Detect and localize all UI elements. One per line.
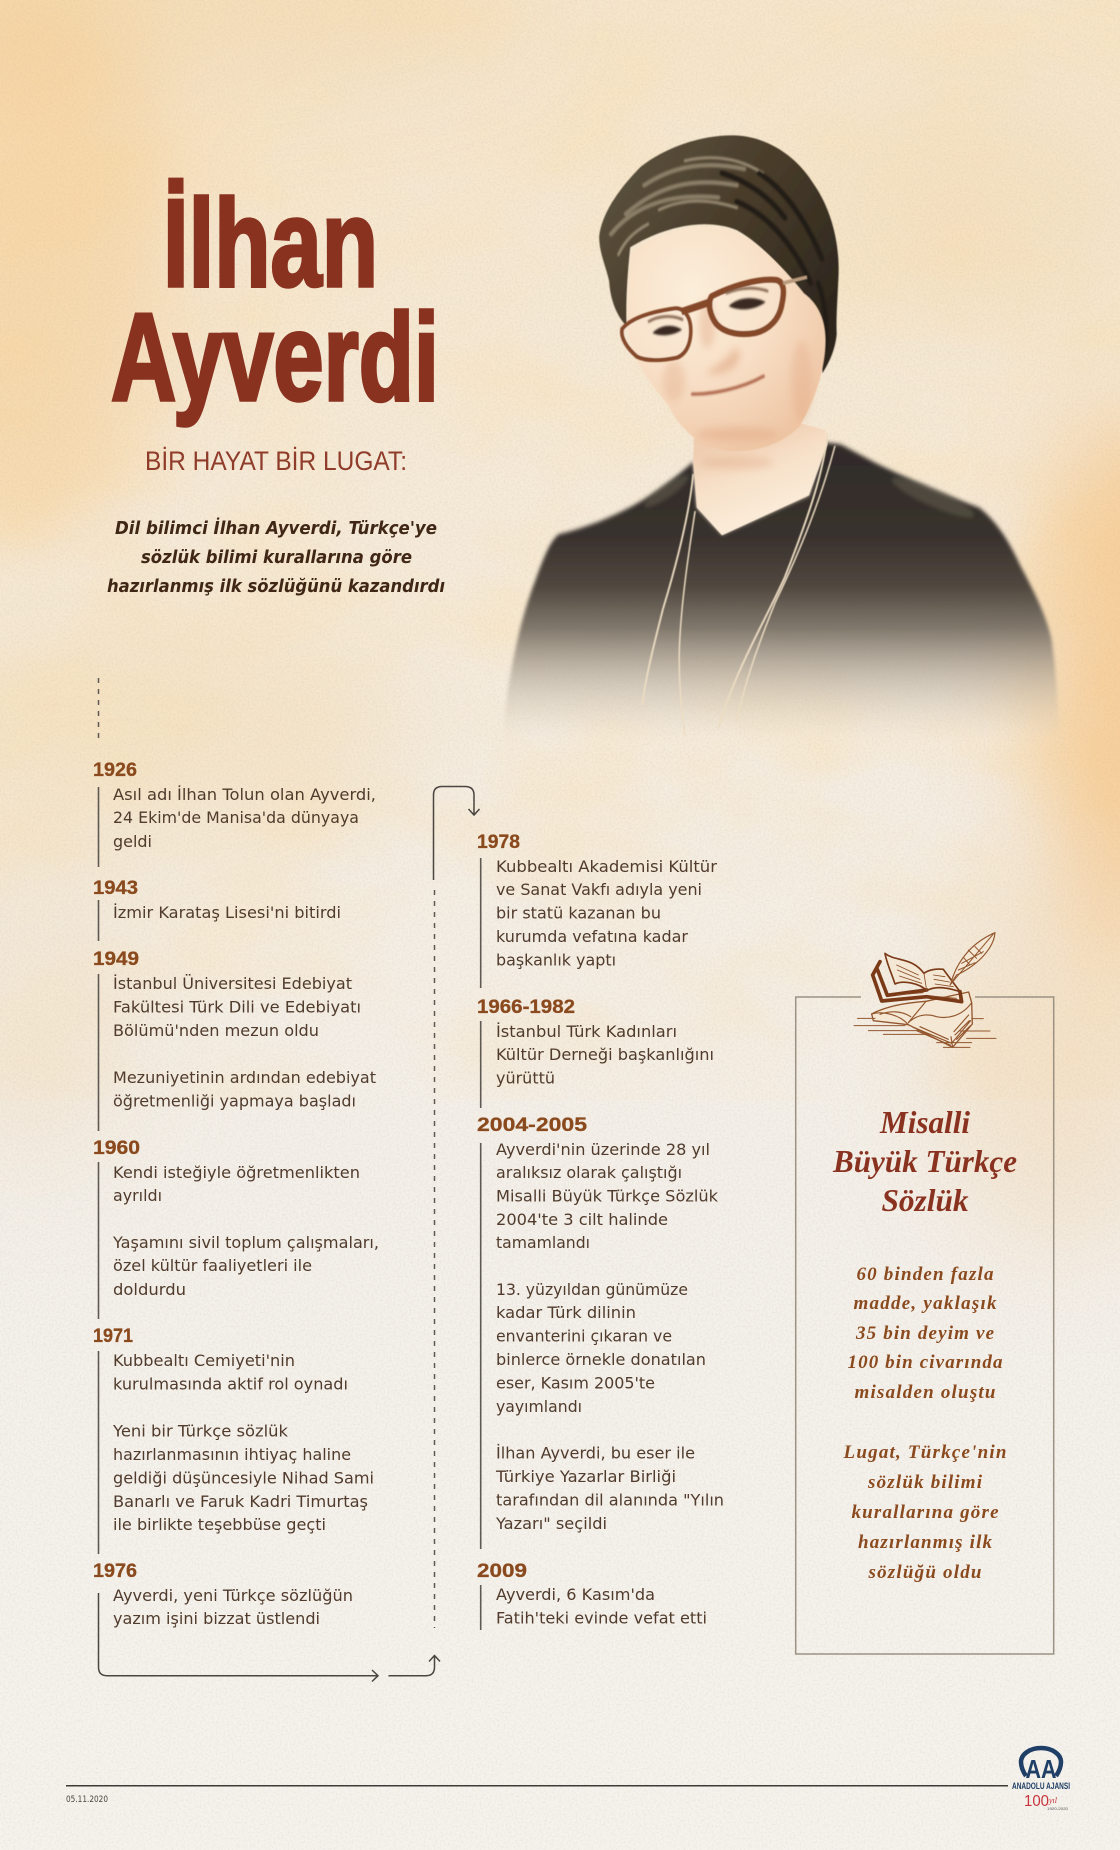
hair xyxy=(599,135,839,373)
timeline entry: 2004-2005: Ayverdi'nin üzerinde 28 yıl xyxy=(496,1140,710,1159)
timeline entry: 2004-2005: 13. yüzyıldan günümüze xyxy=(496,1280,688,1299)
mouth xyxy=(692,376,763,394)
panel text: contents: 35 bin deyim ve xyxy=(855,1323,995,1344)
intro text: Dil bilimci İlhan Ayverdi, Türkçe'ye xyxy=(115,517,437,539)
dress fabric highlights xyxy=(641,471,977,524)
intro text: hazırlanmış ilk sözlüğünü kazandırdı xyxy=(107,576,445,597)
timeline entry: 1949: Bölümü'nden mezun oldu xyxy=(113,1021,319,1040)
timeline entry: 1926: 24 Ekim'de Manisa'da dünyaya xyxy=(113,808,359,827)
timeline entry: 1949 xyxy=(93,948,376,1131)
timeline entry: 1949: Mezuniyetinin ardından edebiyat xyxy=(113,1068,376,1087)
dress and shoulders xyxy=(504,442,1059,756)
timeline entry: 1966-1982: Kültür Derneği başkanlığını xyxy=(496,1045,714,1064)
timeline entry: 2004-2005: envanterini çıkaran ve xyxy=(496,1326,672,1346)
title line: Ayverdi: Ayverdi xyxy=(111,289,439,427)
timeline entry: 2009 xyxy=(477,1560,707,1630)
timeline entry: 1971: 1971 xyxy=(93,1325,133,1347)
timeline entry: 1966-1982: yürüttü xyxy=(496,1068,555,1088)
footer rule xyxy=(66,1785,1008,1787)
timeline entry: 1949: Fakültesi Türk Dili ve Edebiyatı xyxy=(113,998,361,1016)
neck and chest xyxy=(693,422,827,535)
logo: Anadolu Ajansı xyxy=(1012,1748,1070,1811)
timeline entry: 1971: Yeni bir Türkçe sözlük xyxy=(112,1422,289,1440)
timeline entry: 1971: Banarlı ve Faruk Kadri Timurtaş xyxy=(113,1492,368,1511)
timeline entry: 1960: doldurdu xyxy=(113,1280,186,1299)
timeline entry: 2004-2005: tamamlandı xyxy=(496,1233,590,1252)
timeline entry: 2004-2005 xyxy=(477,1114,724,1549)
logo wordmark: ANADOLU AJANSI xyxy=(1012,1781,1070,1791)
timeline entry: 2004-2005: yayımlandı xyxy=(496,1397,582,1416)
timeline entry: 1943 xyxy=(93,877,341,941)
arrow: up to right-hand dashed line xyxy=(388,1656,440,1676)
timeline entry: 2004-2005: Türkiye Yazarlar Birliği xyxy=(495,1467,676,1486)
panel: Misalli Büyük Türkçe Sözlük xyxy=(796,933,1054,1654)
timeline entry: 1943: 1943 xyxy=(93,877,138,899)
timeline connector: dashed climb between columns xyxy=(434,890,436,1628)
necklaces xyxy=(642,434,835,736)
panel frame xyxy=(796,997,1054,1654)
timeline entry: 1971: ile birlikte teşebbüse geçti xyxy=(113,1515,326,1534)
timeline entry: 2004-2005: 2004'te 3 cilt halinde xyxy=(496,1210,668,1229)
timeline entry: 1978: 1978 xyxy=(477,831,520,853)
timeline entry: 2004-2005: tarafından dil alanında "Yılın xyxy=(496,1490,724,1510)
logo letters: AA xyxy=(1026,1754,1057,1784)
eyes xyxy=(648,288,768,335)
timeline entry: 1966-1982 xyxy=(477,996,714,1108)
panel text: significance: sözlüğü oldu xyxy=(868,1562,982,1583)
timeline entry: 2009: Ayverdi, 6 Kasım'da xyxy=(496,1585,655,1604)
arrow: over the top into right column xyxy=(434,786,480,880)
timeline entry: 1943: İzmir Karataş Lisesi'ni bitirdi xyxy=(113,903,341,922)
timeline entry: 2004-2005: 2004-2005 xyxy=(477,1114,587,1136)
icon: open books with quill xyxy=(854,933,996,1047)
panel heading: Misalli xyxy=(879,1104,970,1140)
timeline entry: 2004-2005: aralıksız olarak çalıştığı xyxy=(496,1163,682,1182)
panel text: contents: 60 binden fazla xyxy=(856,1264,994,1285)
timeline entry: 1926 xyxy=(93,759,376,867)
timeline entry: 1949: İstanbul Üniversitesi Edebiyat xyxy=(113,974,352,993)
timeline entry: 1966-1982: 1966-1982 xyxy=(477,996,575,1018)
timeline entry: 2004-2005: eser, Kasım 2005'te xyxy=(496,1374,655,1392)
panel text: contents: 100 bin civarında xyxy=(848,1352,1003,1373)
face xyxy=(627,226,826,451)
logo: Anadolu Ajansı: yıl xyxy=(1048,1796,1058,1805)
timeline connector: top dashed start xyxy=(98,678,100,742)
date: 05.11.2020 xyxy=(66,1795,108,1805)
timeline entry: 2004-2005: binlerce örnekle donatılan xyxy=(496,1350,706,1369)
panel text: significance: Lugat, Türkçe'nin xyxy=(842,1442,1006,1463)
arrow: bottom of left column to right xyxy=(98,1593,378,1682)
intro text xyxy=(107,517,445,597)
timeline entry: 1976: Ayverdi, yeni Türkçe sözlüğün xyxy=(113,1586,353,1605)
cheek and nose shading xyxy=(663,300,812,469)
timeline entry: 1971: geldiği düşüncesiyle Nihad Sami xyxy=(113,1468,374,1488)
timeline entry: 1978: başkanlık yaptı xyxy=(496,950,616,970)
panel heading xyxy=(832,1104,1017,1218)
timeline entry: 1966-1982: İstanbul Türk Kadınları xyxy=(496,1022,677,1041)
timeline entry: 1978: ve Sanat Vakfı adıyla yeni xyxy=(496,880,702,899)
timeline entry: 1960: ayrıldı xyxy=(113,1186,162,1205)
panel text: significance: kurallarına göre xyxy=(852,1502,999,1523)
timeline entry: 2004-2005: kadar Türk dilinin xyxy=(496,1303,636,1322)
intro text: sözlük bilimi kurallarına göre xyxy=(141,547,412,568)
timeline entry: 1926: 1926 xyxy=(93,759,137,781)
logo arch xyxy=(1021,1748,1061,1776)
timeline entry: 2009: Fatih'teki evinde vefat etti xyxy=(496,1608,707,1628)
timeline entry: 1971: hazırlanmasının ihtiyaç haline xyxy=(113,1445,351,1464)
timeline entry: 1971 xyxy=(93,1325,374,1554)
timeline entry: 1978 xyxy=(477,831,717,988)
timeline entry: 2004-2005: İlhan Ayverdi, bu eser ile xyxy=(496,1444,695,1462)
panel text: contents: misalden oluştu xyxy=(854,1382,996,1403)
timeline entry: 1976: 1976 xyxy=(93,1560,137,1582)
timeline entry: 1978: kurumda vefatına kadar xyxy=(496,927,688,946)
timeline entry: 1976 xyxy=(93,1560,353,1628)
timeline entry: 1978: bir statü kazanan bu xyxy=(496,904,661,922)
timeline entry: 1949: öğretmenliği yapmaya başladı xyxy=(113,1092,356,1110)
panel text: significance: sözlük bilimi xyxy=(867,1472,983,1493)
timeline entry: 1971: Kubbealtı Cemiyeti'nin xyxy=(113,1351,295,1370)
glasses xyxy=(622,277,807,360)
panel heading: Büyük Türkçe xyxy=(832,1143,1017,1179)
panel text: significance: hazırlanmış ilk xyxy=(858,1532,992,1553)
timeline entry: 1960: özel kültür faaliyetleri ile xyxy=(113,1256,312,1275)
timeline entry: 1926: geldi xyxy=(113,832,152,851)
title line: İlhan: İlhan xyxy=(163,175,378,313)
timeline entry: 1960 xyxy=(93,1137,379,1319)
subtitle: BİR HAYAT BİR LUGAT: xyxy=(145,445,407,476)
panel heading: Sözlük xyxy=(882,1182,968,1218)
timeline entry: 1971: kurulmasında aktif rol oynadı xyxy=(113,1374,348,1394)
panel text: contents: madde, yaklaşık xyxy=(854,1293,997,1314)
timeline entry: 2009: 2009 xyxy=(477,1560,527,1582)
timeline entry: 1978: Kubbealtı Akademisi Kültür xyxy=(496,857,717,876)
timeline entry: 1960: Kendi isteğiyle öğretmenlikten xyxy=(113,1163,360,1182)
panel text: significance xyxy=(842,1442,1006,1583)
logo: Anadolu Ajansı: 1920-2020 xyxy=(1047,1806,1069,1811)
hair strands xyxy=(611,158,826,348)
timeline entry: 2004-2005: Yazarı" seçildi xyxy=(495,1514,607,1533)
timeline entry: 1949: 1949 xyxy=(93,948,139,970)
timeline entry: 1926: Asıl adı İlhan Tolun olan Ayverdi, xyxy=(113,785,376,804)
portrait of İlhan Ayverdi xyxy=(504,135,1059,756)
timeline entry: 2004-2005: Misalli Büyük Türkçe Sözlük xyxy=(496,1186,719,1206)
100th anniversary mark: 100 xyxy=(1024,1793,1049,1810)
panel text: contents xyxy=(848,1264,1003,1403)
timeline entry: 1960: Yaşamını sivil toplum çalışmaları, xyxy=(112,1233,379,1252)
timeline entry: 1960: 1960 xyxy=(93,1137,140,1159)
timeline entry: 1976: yazım işini bizzat üstlendi xyxy=(113,1609,320,1628)
title xyxy=(111,175,439,427)
